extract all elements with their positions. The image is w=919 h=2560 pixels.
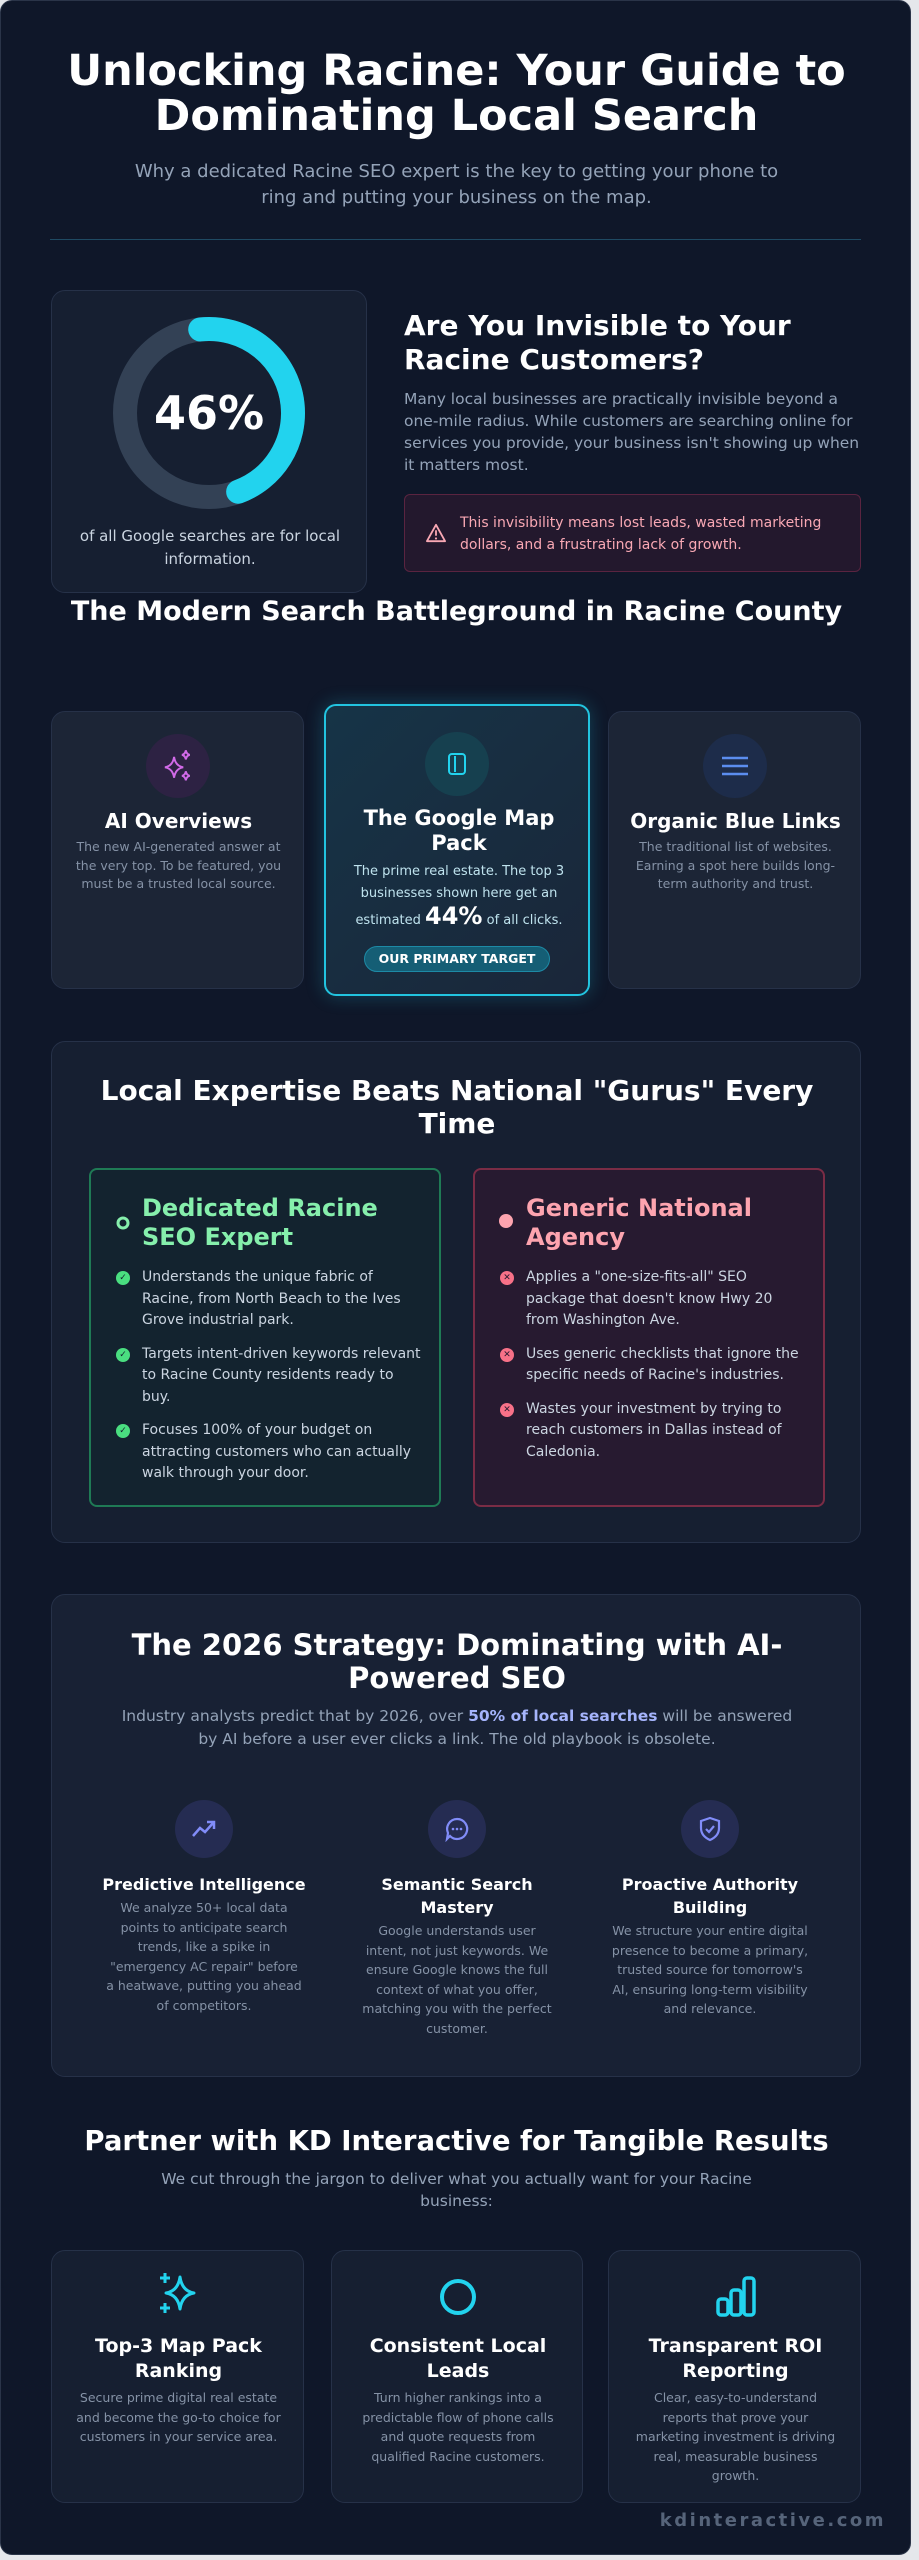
list: agency points: Uses generic checklists that ignore the specific needs of Racine's industries. (526, 1346, 799, 1383)
list: agency points (500, 1269, 799, 1460)
heading: invisible: Are You Invisible to Your Racine Customers? (404, 309, 791, 376)
icon: trend (175, 1800, 233, 1858)
card: ROI reporting: Transparent ROI Reporting (649, 2335, 822, 2382)
list: agency points: Wastes your investment by trying to reach customers in Dallas instead of Caledonia. (526, 1400, 782, 1460)
column: authority: We structure your entire digital presence to become a primary, trusted source for tomorrow's AI, ensuring long-term visibility and relevance. (612, 1923, 808, 2016)
list: expert points: ✓ (119, 1350, 127, 1360)
column: semantic (362, 1800, 552, 2036)
card: consistent leads: Consistent Local Leads (370, 2335, 546, 2382)
list: expert points: Focuses 100% of your budget on attracting customers who can actually walk through your door. (142, 1422, 411, 1481)
list: agency points: ✕ (503, 1350, 511, 1360)
card: generic agency: Generic National Agency (526, 1194, 752, 1251)
text: strategy intro: Industry analysts predict that by 2026, over 50% of local searches will be answered by AI before a user ever clicks a link. The old playbook is obsolete. (122, 1707, 792, 1748)
icon: list (703, 734, 767, 798)
button: primary target (364, 946, 550, 972)
panel: Organic Blue Links (608, 711, 861, 989)
panel: AI Overviews: AI Overviews (105, 809, 252, 833)
column: authority: Proactive Authority Building (622, 1875, 798, 1917)
icon: map (425, 732, 489, 796)
text: partner subtitle: We cut through the jargon to deliver what you actually want for your Racine business: (161, 2170, 752, 2210)
panel: stat donut (51, 290, 367, 593)
subtitle: Why a dedicated Racine SEO expert is the key to getting your phone to ring and putting your business on the map. (135, 161, 778, 208)
panel: AI Overviews (51, 711, 304, 989)
icon: refresh circle (440, 2279, 476, 2315)
panel: Google Map Pack (324, 704, 590, 996)
list: expert points: Targets intent-driven keywords relevant to Racine County residents ready to buy. (142, 1346, 421, 1404)
card: dedicated expert (89, 1168, 441, 1507)
list: expert points: Understands the unique fabric of Racine, from North Beach to the Ives Grove industrial park. (142, 1269, 401, 1328)
card: top-3 ranking (51, 2250, 304, 2503)
heading: The 2026 Strategy: Dominating with AI-Powered SEO (132, 1628, 782, 1695)
icon: target (116, 1216, 130, 1230)
stat caption: of all Google searches are for local information. (80, 527, 340, 568)
column: authority (612, 1800, 808, 2016)
panel: Organic Blue Links: Organic Blue Links (630, 809, 841, 833)
list: expert points: ✓ (119, 1426, 127, 1436)
donut chart 46% (113, 317, 305, 509)
icon: warning (426, 524, 446, 542)
footer: website: kdinteractive.com (660, 2510, 886, 2531)
panel: 2026 strategy (51, 1594, 861, 2077)
icon: sparkles (146, 734, 210, 798)
column: semantic: Semantic Search Mastery (381, 1875, 533, 1917)
panel: AI Overviews: The new AI-generated answer at the very top. To be featured, you must be a trusted local source. (76, 839, 281, 891)
column: predictive: We analyze 50+ local data points to anticipate search trends, like a spike in "emergency AC repair" before a heatwave, putting you ahead of competitors. (106, 1900, 302, 2012)
column: predictive: Predictive Intelligence (102, 1875, 306, 1894)
button: primary target: OUR PRIMARY TARGET (379, 951, 535, 966)
panel: Google Map Pack: The prime real estate. The top 3 businesses shown here get an estimated 44% of all clicks. (354, 864, 564, 930)
card: generic agency (473, 1168, 825, 1507)
panel: local vs national (51, 1041, 861, 1543)
callout: warning (404, 494, 861, 572)
icon: broken heart (499, 1214, 513, 1228)
icon: chat (428, 1800, 486, 1858)
heading: Local Expertise Beats National "Gurus" Every Time (101, 1074, 813, 1140)
column: semantic: Google understands user intent, not just keywords. We ensure Google knows the full context of what you offer, matching you with the perfect customer. (362, 1923, 552, 2036)
card: consistent leads (331, 2250, 583, 2503)
list: agency points: Applies a "one-size-fits-all" SEO package that doesn't know Hwy 20 from Washington Ave. (526, 1269, 772, 1328)
column: predictive (102, 1800, 306, 2012)
list: agency points: ✕ (503, 1273, 511, 1283)
card: ROI reporting: Clear, easy-to-understand reports that prove your marketing investment is driving real, measurable business growth. (636, 2390, 835, 2483)
heading: battleground: The Modern Search Battleground in Racine County (71, 596, 842, 627)
donut chart 46%: 46% (154, 386, 264, 440)
card: consistent leads: Turn higher rankings into a predictable flow of phone calls and quote requests from qualified Racine customers. (362, 2390, 554, 2464)
icon: bar chart (716, 2276, 756, 2317)
list: expert points (116, 1269, 421, 1481)
title: Unlocking Racine: Your Guide to Dominating Local Search (67, 46, 846, 141)
heading: partner: Partner with KD Interactive for Tangible Results (84, 2125, 829, 2157)
card: ROI reporting (608, 2250, 861, 2503)
text: invisible paragraph: Many local businesses are practically invisible beyond a one-mile radius. While customers are searching online for services you provide, your business isn't showing up when it matters most. (404, 390, 859, 474)
panel: Organic Blue Links: The traditional list of websites. Earning a spot here builds long-term authority and trust. (636, 839, 835, 891)
card: top-3 ranking: Top-3 Map Pack Ranking (95, 2335, 262, 2382)
callout: warning: This invisibility means lost leads, wasted marketing dollars, and a frustrating lack of growth. (460, 515, 821, 553)
list: expert points: ✓ (119, 1273, 127, 1283)
list: agency points: ✕ (503, 1404, 511, 1414)
panel: Google Map Pack: The Google Map Pack (364, 806, 554, 855)
icon: shield (681, 1800, 739, 1858)
icon: sparkle (160, 2273, 196, 2313)
card: dedicated expert: Dedicated Racine SEO Expert (142, 1194, 378, 1251)
card: top-3 ranking: Secure prime digital real estate and become the go-to choice for customers in your service area. (76, 2390, 281, 2444)
